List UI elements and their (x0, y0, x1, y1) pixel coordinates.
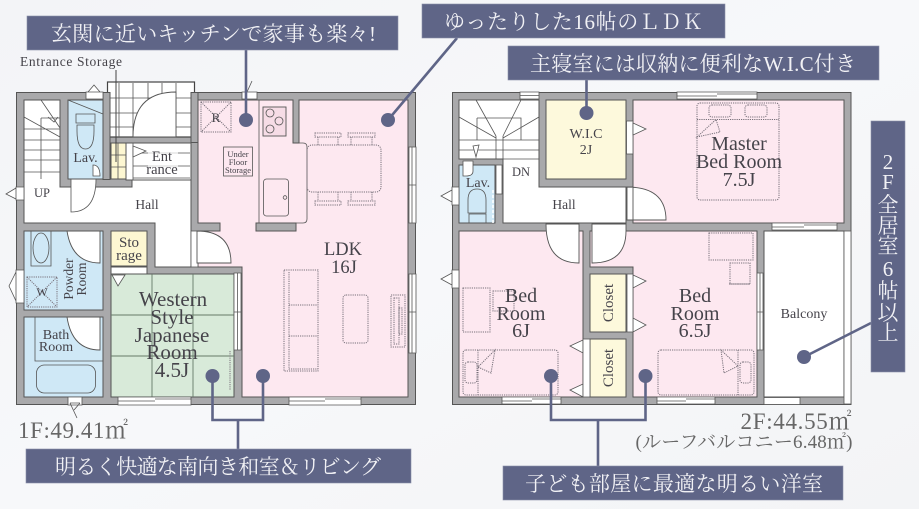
room: bed room 6J: 6J (512, 320, 530, 342)
outer walls (16, 92, 416, 404)
room: bed room 6J: Room (497, 303, 546, 325)
room: lavatory 2F: Lav. (466, 176, 490, 191)
callout: kitchen (27, 16, 398, 127)
under floor storage and R: Under (227, 149, 249, 159)
room: entrance (126, 143, 191, 180)
room: lavatory 1F: Lav. (73, 151, 98, 166)
room: bath room: Room (39, 340, 73, 355)
label: Entrance Storage: Entrance Storage (20, 54, 122, 69)
windows 2F (441, 92, 837, 404)
callout: W.I.C (508, 46, 879, 120)
label: Hall 1F: Hall (135, 197, 159, 212)
label: LDK: LDK (324, 240, 363, 260)
room: master bed room: 7.5J (723, 169, 756, 191)
door to hall from lav (71, 179, 96, 212)
room: LDK (198, 100, 408, 397)
closet upper (590, 274, 633, 332)
window: bottom Japanese room (118, 397, 191, 405)
under floor storage and R: Floor (229, 157, 247, 167)
area label 1F: 1F:49.41㎡ (18, 418, 128, 443)
room: lavatory 1F (68, 100, 103, 179)
room: bed room 6.5J: Room (671, 303, 720, 325)
kitchen wall stub (256, 223, 296, 231)
room: bed room 6.5J (590, 224, 757, 397)
callout: all rooms 6 jo or more: F (882, 170, 894, 194)
under floor storage and R (201, 102, 252, 176)
window: bottom LDK (289, 397, 361, 405)
closet upper: Closet (601, 283, 617, 322)
room: western style Japanese room: Western (139, 287, 208, 311)
callout: all rooms 6 jo or more: 室 (878, 234, 898, 258)
window: right LDK upper (409, 147, 416, 223)
room: master bed room: Master (711, 133, 767, 155)
callout: all rooms 6 jo or more: 全 (878, 193, 898, 217)
area label 2F: (ルーフバルコニー6.48㎡) (636, 431, 852, 453)
room: powder room (24, 231, 103, 310)
room: western style Japanese room (111, 274, 234, 397)
room: master bed room (626, 100, 844, 223)
callout: all rooms 6 jo or more: 以 (878, 301, 900, 325)
room: W.I.C: 2J (580, 143, 593, 158)
stairs 2F (459, 100, 539, 159)
entrance porch with tiles (103, 82, 198, 180)
room: western style Japanese room: Style (150, 305, 194, 329)
label: UP: UP (34, 186, 50, 200)
door: LDK (191, 231, 231, 267)
callout: children's rooms: 子ども部屋に最適な明るい洋室 (525, 472, 823, 496)
callout: all rooms 6 jo or more: 帖 (878, 279, 898, 303)
room: master bed room: Bed Room (696, 151, 782, 173)
callout: all rooms 6 jo or more: 6 (883, 257, 893, 281)
room: bath room (24, 317, 103, 397)
floor plan: 2F (441, 92, 851, 404)
room: bath room: Bath (43, 328, 69, 343)
callout: kitchen: 玄関に近いキッチンで家事も楽々! (51, 22, 376, 46)
room: lavatory 2F (459, 161, 502, 223)
stairs 1F (24, 100, 60, 179)
room: storage: rage (116, 248, 142, 264)
closet lower (583, 339, 626, 397)
label: Hall 2F: Hall (552, 197, 576, 212)
callout: south rooms: 明るく快適な南向き和室＆リビング (55, 455, 381, 479)
label: LDK (324, 240, 363, 278)
entrance storage (111, 143, 126, 179)
room: bed room 6J (459, 224, 583, 397)
label: DN: DN (512, 165, 530, 179)
callout: children's rooms (503, 369, 843, 500)
sofa, low table, TV (284, 270, 405, 371)
callout: W.I.C: 主寝室には収納に便利なW.I.C付き (530, 52, 856, 76)
stairs and hall floor (459, 100, 626, 223)
room: W.I.C: W.I.C (570, 127, 602, 142)
under floor storage and R: R (212, 110, 221, 125)
room: storage (111, 231, 147, 274)
hall and stairs floor (24, 100, 191, 267)
dining table and chairs (307, 133, 381, 205)
balcony: Balcony (781, 307, 827, 322)
label: LDK: 16J (331, 258, 357, 278)
room: entrance: rance (146, 162, 178, 178)
area label 2F: 2F:44.55㎡ (740, 409, 852, 434)
window: Japanese room side (234, 273, 241, 350)
room: W.I.C (546, 100, 626, 179)
window: right LDK lower (409, 274, 416, 353)
room: western style Japanese room: 4.5J (155, 358, 189, 382)
callout: all rooms 6 jo or more (797, 121, 905, 372)
room: powder room: W (36, 285, 48, 299)
outer walls 2F (452, 92, 851, 404)
callout: LDK (381, 4, 725, 127)
under floor storage and R: Storage (225, 165, 251, 175)
callout: south rooms (26, 369, 411, 483)
kitchen counter and stove (259, 100, 307, 223)
closet lower: Closet (601, 348, 617, 387)
room: bed room 6.5J: 6.5J (679, 320, 712, 342)
callout: all rooms 6 jo or more: 上 (878, 321, 898, 345)
leader: entrance storage (115, 70, 117, 162)
floor plan: 1F (6, 54, 416, 418)
area label 2F (636, 409, 852, 453)
callout: LDK: ゆったりした16帖のＬＤＫ (444, 10, 703, 34)
room: western style Japanese room: Room (146, 340, 198, 364)
room: bed room 6J: Bed (505, 285, 537, 307)
room: western style Japanese room: Japanese (135, 323, 209, 347)
room: powder room: Powder (61, 258, 76, 300)
room: bed room 6.5J: Bed (679, 285, 711, 307)
callout: all rooms 6 jo or more: 2 (883, 150, 893, 174)
room: entrance: Ent (152, 149, 172, 165)
balcony (764, 231, 851, 404)
vents 1F (6, 81, 257, 418)
callout: all rooms 6 jo or more: 居 (878, 214, 898, 238)
room: storage: Sto (119, 235, 139, 251)
room: powder room: Room (74, 262, 89, 296)
